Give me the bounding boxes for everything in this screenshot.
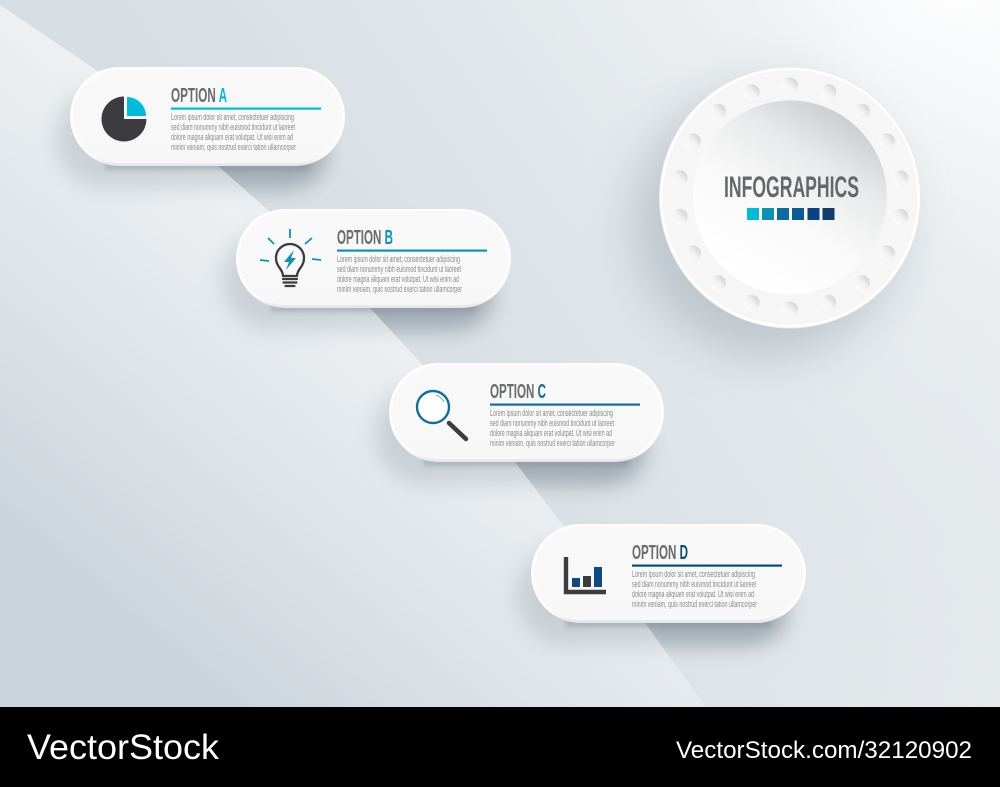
text block: option B: dolore magna aliquam erat volutpat. Ut wisi enim ad xyxy=(337,274,459,284)
panel: option A xyxy=(56,67,345,188)
footer logo: VectorStock xyxy=(27,728,220,767)
colour squares xyxy=(747,208,834,220)
panel: central circle xyxy=(633,66,921,357)
panel: option B xyxy=(222,209,511,330)
text block: option D xyxy=(632,569,757,609)
text block: option A: minim veniam, quis nostrud exerci tation ullamcorper xyxy=(171,142,296,152)
text block: option D: dolore magna aliquam erat volutpat. Ut wisi enim ad xyxy=(632,589,754,599)
text block: option B: Lorem ipsum dolor sit amet, consectetuer adipiscing xyxy=(337,254,460,264)
divider: option B xyxy=(337,250,487,252)
text block: option A: dolore magna aliquam erat volutpat. Ut wisi enim ad xyxy=(171,132,293,142)
inner well xyxy=(693,100,887,294)
text block: option C: dolore magna aliquam erat volutpat. Ut wisi enim ad xyxy=(490,428,612,438)
ring dots xyxy=(672,78,908,318)
title: INFOGRAPHICS xyxy=(724,171,859,204)
panel: option C xyxy=(375,363,664,484)
icon: magnifying glass xyxy=(417,391,466,439)
text block: option D: Lorem ipsum dolor sit amet, consectetuer adipiscing xyxy=(632,569,755,579)
footer url: VectorStock.com/32120902 xyxy=(676,737,972,764)
panel: option D xyxy=(517,524,806,645)
divider: option A xyxy=(171,108,321,110)
divider: option D xyxy=(632,564,782,567)
footer bar xyxy=(0,707,1000,787)
heading: option C: OPTION C xyxy=(490,381,546,403)
text block: option A: Lorem ipsum dolor sit amet, consectetuer adipiscing xyxy=(171,112,294,122)
text block: option C: Lorem ipsum dolor sit amet, consectetuer adipiscing xyxy=(490,408,613,418)
text block: option B: sed diam nonummy nibh euismod tincidunt ut laoreet xyxy=(337,264,461,274)
text block: option C: sed diam nonummy nibh euismod tincidunt ut laoreet xyxy=(490,418,614,428)
icon: light bulb xyxy=(260,229,321,286)
text block: option A xyxy=(171,112,296,152)
text block: option C xyxy=(490,408,615,448)
text block: option A: sed diam nonummy nibh euismod tincidunt ut laoreet xyxy=(171,122,295,132)
text block: option D: minim veniam, quis nostrud exerci tation ullamcorper xyxy=(632,599,757,609)
icon: pie chart xyxy=(102,96,146,142)
heading: option A: OPTION A xyxy=(171,85,227,107)
divider: option C xyxy=(490,404,640,406)
icon: bar chart xyxy=(566,557,606,592)
text block: option B: minim veniam, quis nostrud exerci tation ullamcorper xyxy=(337,284,462,294)
heading: option D: OPTION D xyxy=(632,542,688,564)
text block: option B xyxy=(337,254,462,294)
text block: option C: minim veniam, quis nostrud exerci tation ullamcorper xyxy=(490,438,615,448)
text block: option D: sed diam nonummy nibh euismod tincidunt ut laoreet xyxy=(632,579,756,589)
heading: option B: OPTION B xyxy=(337,227,393,249)
